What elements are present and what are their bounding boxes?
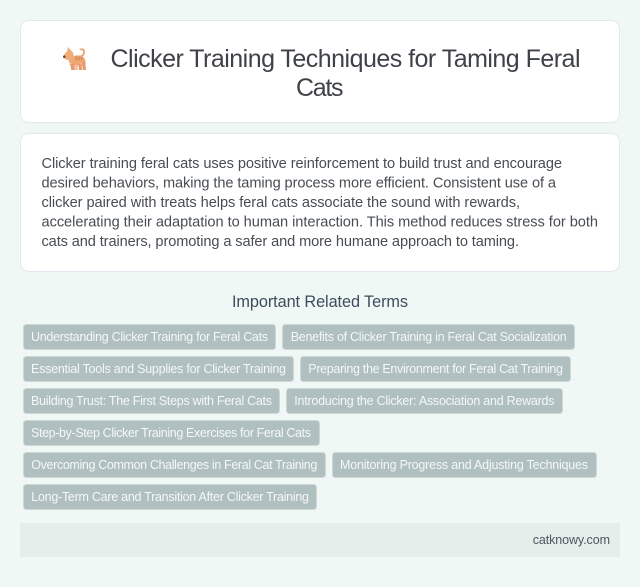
panel: title card — [20, 20, 620, 122]
tag: introducing — [286, 388, 562, 414]
title text — [110, 45, 580, 102]
tag: monitoring — [332, 452, 596, 478]
tag list — [24, 324, 596, 510]
footer source text: catknowy.com — [533, 533, 610, 547]
heading: important related terms: Important Related Terms — [232, 293, 408, 311]
paragraph text: cats and trainers, promoting a safer and more humane approach to taming. — [42, 234, 519, 250]
paragraph text: desired behaviors, making the taming process more efficient. Consistent use of a — [42, 176, 557, 192]
tag: challenges — [24, 452, 326, 478]
tag: long-term care: Long-Term Care and Transition After Clicker Training — [31, 490, 309, 504]
tag: introducing: Introducing the Clicker: Association and Rewards — [294, 394, 554, 408]
tag: building trust: Building Trust: The First Steps with Feral Cats — [31, 394, 272, 408]
tag: monitoring: Monitoring Progress and Adjusting Techniques — [340, 458, 588, 472]
paragraph text: clicker paired with treats helps feral cats associate the sound with rewards, — [42, 195, 520, 211]
footer bar — [20, 523, 620, 557]
paragraph text: accelerating their adaptation to human interaction. This method reduces stress for both — [42, 214, 598, 230]
tag: challenges: Overcoming Common Challenges in Feral Cat Training — [31, 458, 317, 472]
tag: long-term care — [24, 484, 316, 510]
panel: introduction paragraph — [20, 134, 620, 272]
tag: environment: Preparing the Environment for Feral Cat Training — [308, 362, 563, 376]
tag: exercises — [24, 420, 320, 446]
tag: building trust — [24, 388, 280, 414]
tag: understanding — [24, 324, 276, 350]
paragraph text — [42, 156, 598, 250]
tag: environment — [300, 356, 570, 382]
tag: tools: Essential Tools and Supplies for Clicker Training — [31, 362, 286, 376]
icon: orange cat — [63, 47, 86, 70]
tag: benefits — [282, 324, 574, 350]
title text: Clicker Training Techniques for Taming Feral — [110, 45, 580, 73]
tag: benefits: Benefits of Clicker Training in Feral Cat Socialization — [291, 330, 567, 344]
title text: Cats — [296, 74, 344, 102]
tag: tools — [24, 356, 294, 382]
tag: understanding: Understanding Clicker Training for Feral Cats — [31, 330, 268, 344]
paragraph text: Clicker training feral cats uses positive reinforcement to build trust and encourage — [42, 156, 562, 172]
tag: exercises: Step-by-Step Clicker Training Exercises for Feral Cats — [31, 426, 311, 440]
